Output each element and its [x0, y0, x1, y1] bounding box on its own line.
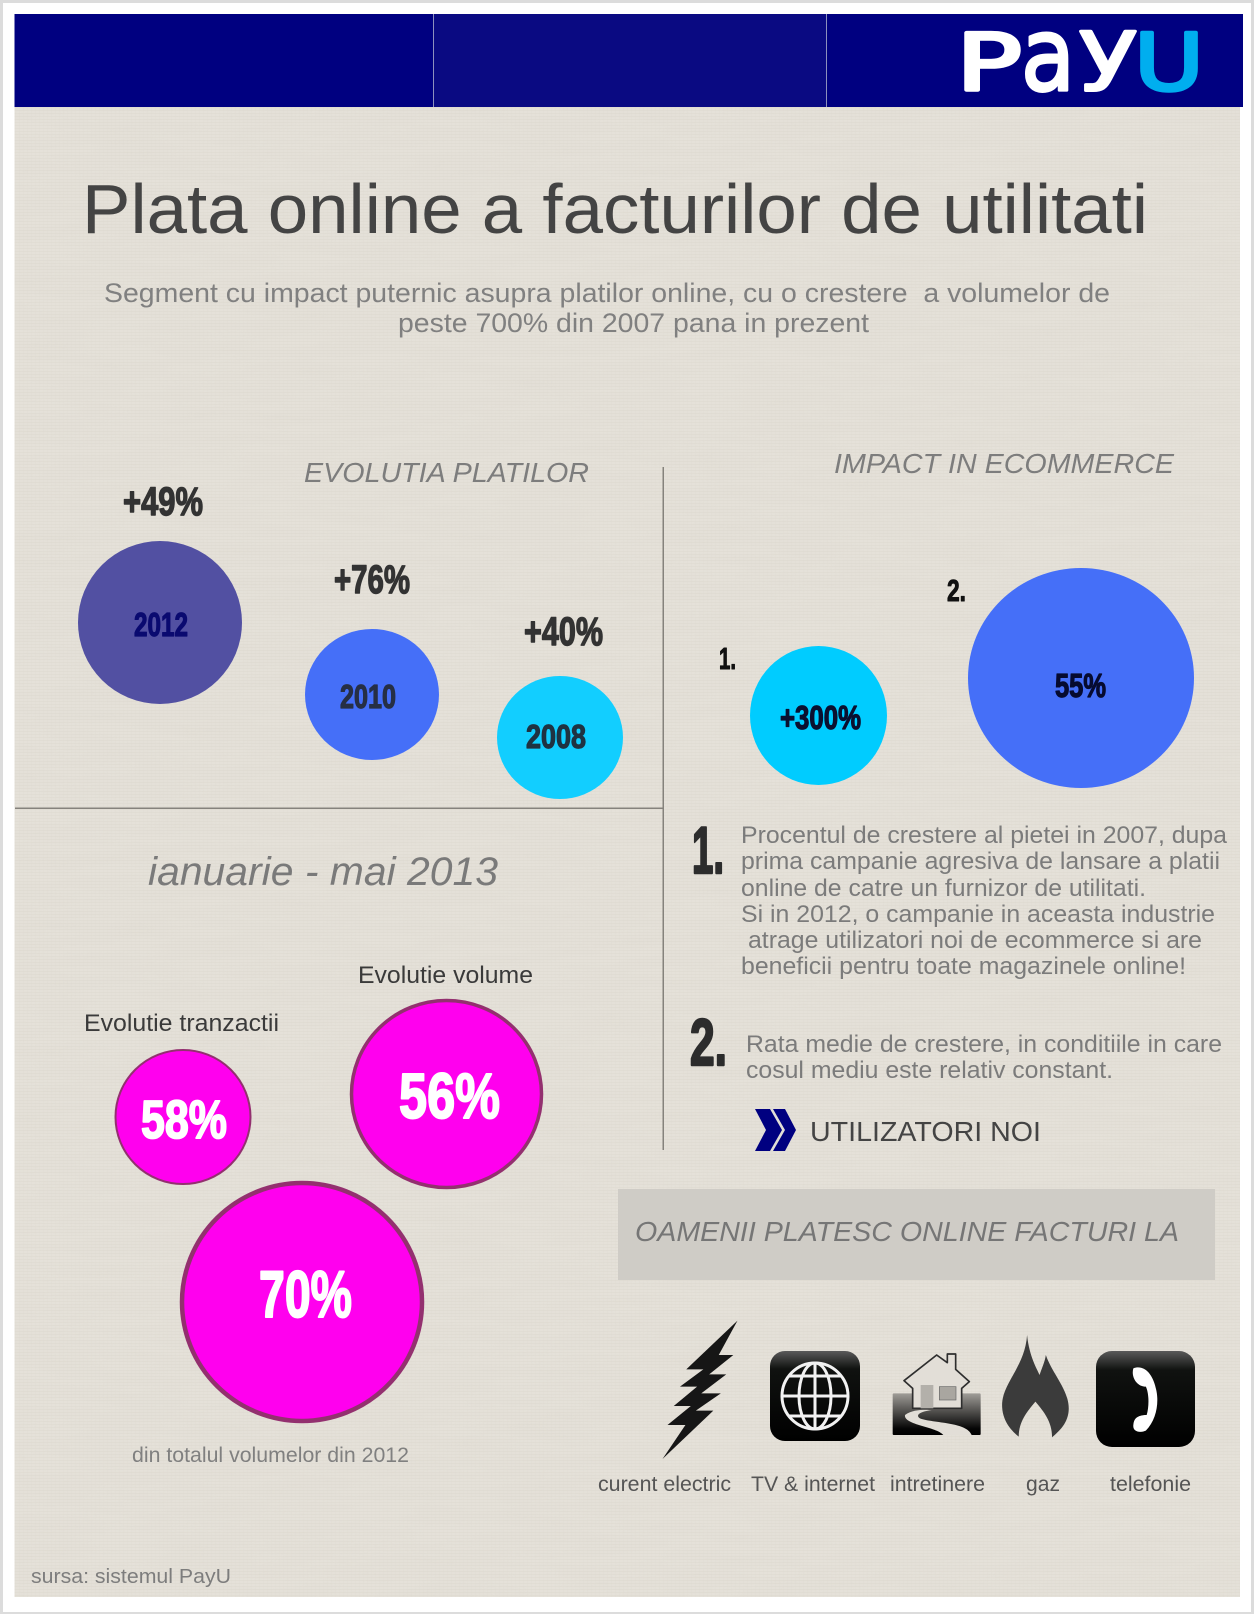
subtitle: Segment cu impact puternic asupra platilor online, cu o crestere a volumelor de	[104, 278, 1110, 308]
text: explanation 1: Si in 2012, o campanie in aceasta industrie	[741, 901, 1215, 928]
divider: horizontal	[15, 808, 663, 809]
bubble: 2010	[305, 629, 439, 760]
text: explanation 2: cosul mediu este relativ constant.	[746, 1057, 1113, 1084]
panel: grey callout: OAMENII PLATESC ONLINE FACTURI LA	[635, 1216, 1179, 1247]
text: explanation 1: Procentul de crestere al pietei in 2007, dupa	[741, 822, 1228, 849]
label: +49%: +49%	[123, 480, 203, 524]
label: evolutie volume: Evolutie volume	[358, 962, 533, 989]
bubble: +300%	[750, 646, 887, 785]
logo: PayU: y	[1078, 3, 1138, 93]
bubble: 55%: 55%	[1055, 667, 1106, 704]
subtitle: peste 700% din 2007 pana in prezent	[398, 308, 870, 338]
bubble: 56%	[352, 1000, 542, 1188]
label: evolutie tranzactii: Evolutie tranzactii	[84, 1010, 279, 1037]
numeral: 2.: 2.	[690, 1005, 727, 1079]
bubble: +300%: +300%	[780, 699, 861, 736]
label: utilizatori noi: UTILIZATORI NOI	[810, 1116, 1041, 1147]
icon labels: intretinere	[890, 1473, 985, 1496]
bubble: 2010: 2010	[340, 678, 396, 715]
bubble: 2012	[78, 541, 242, 704]
title: Plata online a facturilor de utilitati	[82, 170, 1148, 248]
divider: vertical	[662, 467, 664, 1150]
logo: PayU: U	[1134, 19, 1204, 109]
note 2	[690, 1005, 1222, 1084]
icon: telephone tile	[1096, 1351, 1195, 1447]
icon: globe tile	[770, 1351, 860, 1441]
icon labels: telefonie	[1110, 1473, 1191, 1496]
bubble: 2012: 2012	[134, 606, 188, 643]
icon: lightning bolt	[663, 1321, 738, 1459]
text: explanation 2: Rata medie de crestere, in conditiile in care	[746, 1031, 1222, 1058]
bubble: 56%: 56%	[399, 1060, 500, 1132]
icon labels	[598, 1473, 1191, 1496]
bubble: 2008	[497, 676, 623, 799]
icon labels: TV & internet	[751, 1473, 875, 1496]
panel: ianuarie - mai 2013	[84, 850, 542, 1467]
label: +76%: +76%	[334, 558, 410, 602]
bubble: 58%: 58%	[141, 1090, 227, 1150]
logo: PayU	[956, 0, 1204, 115]
panel: grey callout	[618, 1189, 1215, 1280]
subtitle	[104, 278, 1110, 338]
text: explanation 1: online de catre un furnizor de utilitati.	[741, 875, 1146, 902]
logo: PayU: P	[956, 19, 1022, 109]
icon: gas flame	[1002, 1335, 1069, 1437]
text: explanation 1: beneficii pentru toate magazinele online!	[741, 953, 1186, 980]
icon labels: gaz	[1026, 1473, 1060, 1496]
panel: evolutia platilor	[78, 457, 623, 799]
heading: period: ianuarie - mai 2013	[148, 850, 498, 894]
bubble: 70%: 70%	[259, 1257, 352, 1331]
bubble: 58%	[116, 1050, 250, 1184]
icon: house	[893, 1354, 981, 1435]
icon labels: curent electric	[598, 1473, 731, 1496]
note 1	[692, 813, 1228, 980]
icon: double chevron	[755, 1109, 796, 1151]
text: explanation 1: prima campanie agresiva de lansare a platii	[741, 848, 1220, 875]
numeral: 1.: 1.	[692, 813, 724, 887]
marker: 2.: 2.	[947, 573, 966, 608]
caption: din totalul: din totalul volumelor din 2012	[132, 1444, 409, 1467]
text: explanation 1: atrage utilizatori noi de ecommerce si are	[748, 927, 1202, 954]
bubble: 70%	[182, 1183, 422, 1421]
bubble: 2008: 2008	[526, 718, 586, 755]
text: explanation 1	[741, 822, 1228, 980]
header banner	[14, 0, 1243, 115]
heading: impact in ecommerce: IMPACT IN ECOMMERCE	[834, 448, 1174, 479]
bubble: 55%	[968, 568, 1194, 788]
text: explanation 2	[746, 1031, 1222, 1084]
label: +40%: +40%	[524, 610, 603, 654]
panel: impact in ecommerce	[719, 448, 1194, 788]
source note: sursa: sistemul PayU	[31, 1566, 231, 1588]
heading: evolutia platilor: EVOLUTIA PLATILOR	[304, 457, 589, 488]
marker: 1.: 1.	[719, 641, 736, 676]
